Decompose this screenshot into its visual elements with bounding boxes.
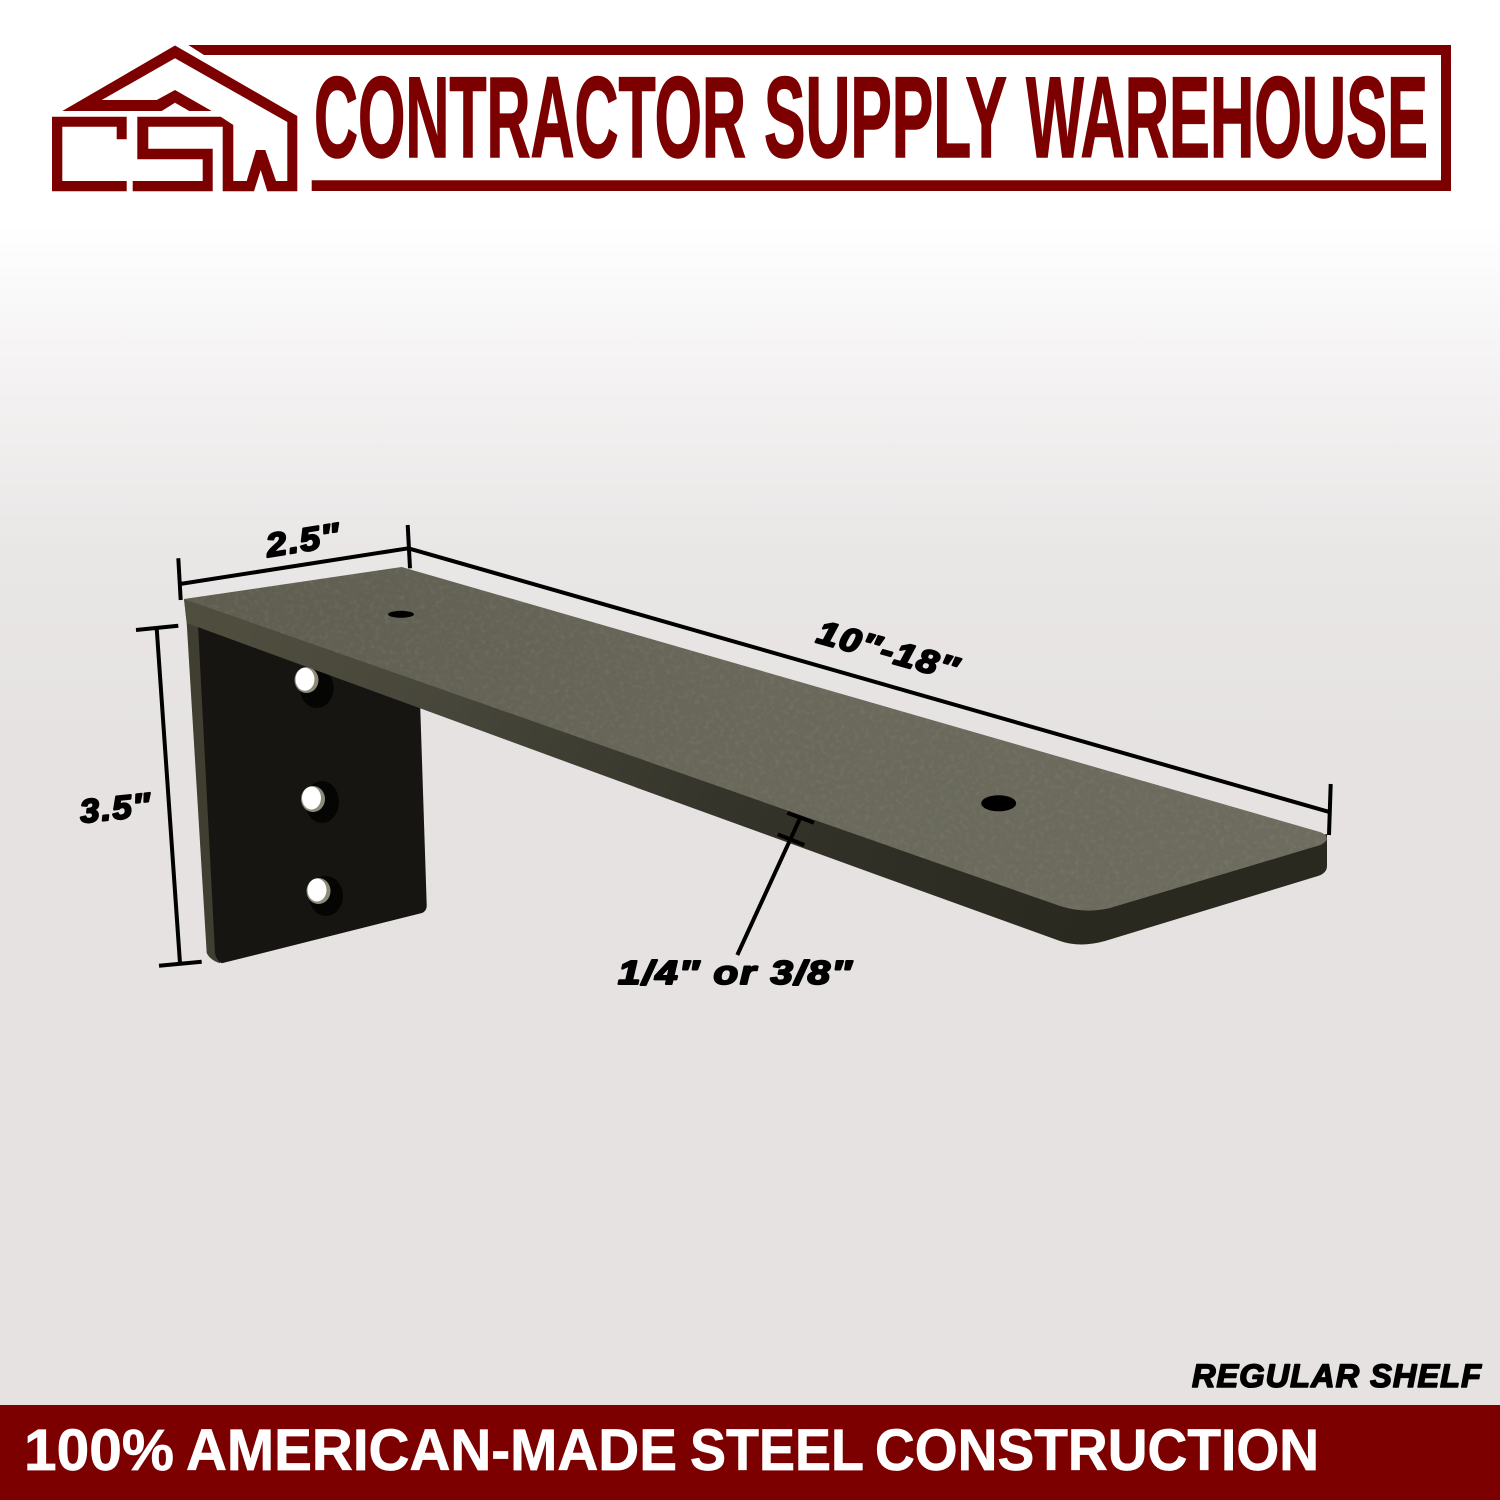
- dimension: width 2.5 inch: [178, 516, 410, 600]
- shelf plate top face: [184, 567, 1327, 911]
- dimension: height 3.5 inch: 3.5″: [78, 786, 153, 830]
- footer text: CONSTRUCTION: [875, 1418, 1319, 1483]
- footer banner: [0, 1405, 1500, 1500]
- header frame: [188, 45, 1451, 191]
- dimension: height 3.5 inch: [78, 626, 202, 966]
- shelf surface speckle: [215, 576, 1272, 896]
- footer text: 100%: [24, 1418, 174, 1483]
- title: SUPPLY: [764, 54, 1007, 182]
- dimension: thickness callout: 1/4″ or 3/8″: [618, 954, 853, 991]
- bracket vertical plate face: [198, 625, 427, 963]
- dimension: thickness callout: [618, 813, 853, 991]
- shelf screw hole, front: [981, 795, 1016, 811]
- footer text: STEEL: [690, 1418, 864, 1483]
- shelf screw hole, back: [388, 611, 414, 618]
- footer text: [24, 1418, 1319, 1483]
- dimension: length 10 to 18 inch: 10″-18″: [813, 613, 964, 688]
- shelf type label: REGULAR SHELF: [1192, 1358, 1482, 1394]
- plate countersunk holes: [294, 667, 343, 916]
- dimension: width 2.5 inch: 2.5″: [262, 516, 343, 564]
- bracket vertical plate edge: [184, 599, 240, 963]
- dimension: length 10 to 18 inch: [408, 548, 1331, 835]
- header: company logo and name: [52, 45, 1451, 191]
- icon: CSW house logo: [52, 46, 297, 191]
- title: CONTRACTOR: [314, 54, 746, 182]
- steel bracket illustration: [184, 567, 1329, 963]
- shelf plate thickness edge: [184, 599, 1327, 944]
- footer text: AMERICAN-MADE: [186, 1418, 677, 1483]
